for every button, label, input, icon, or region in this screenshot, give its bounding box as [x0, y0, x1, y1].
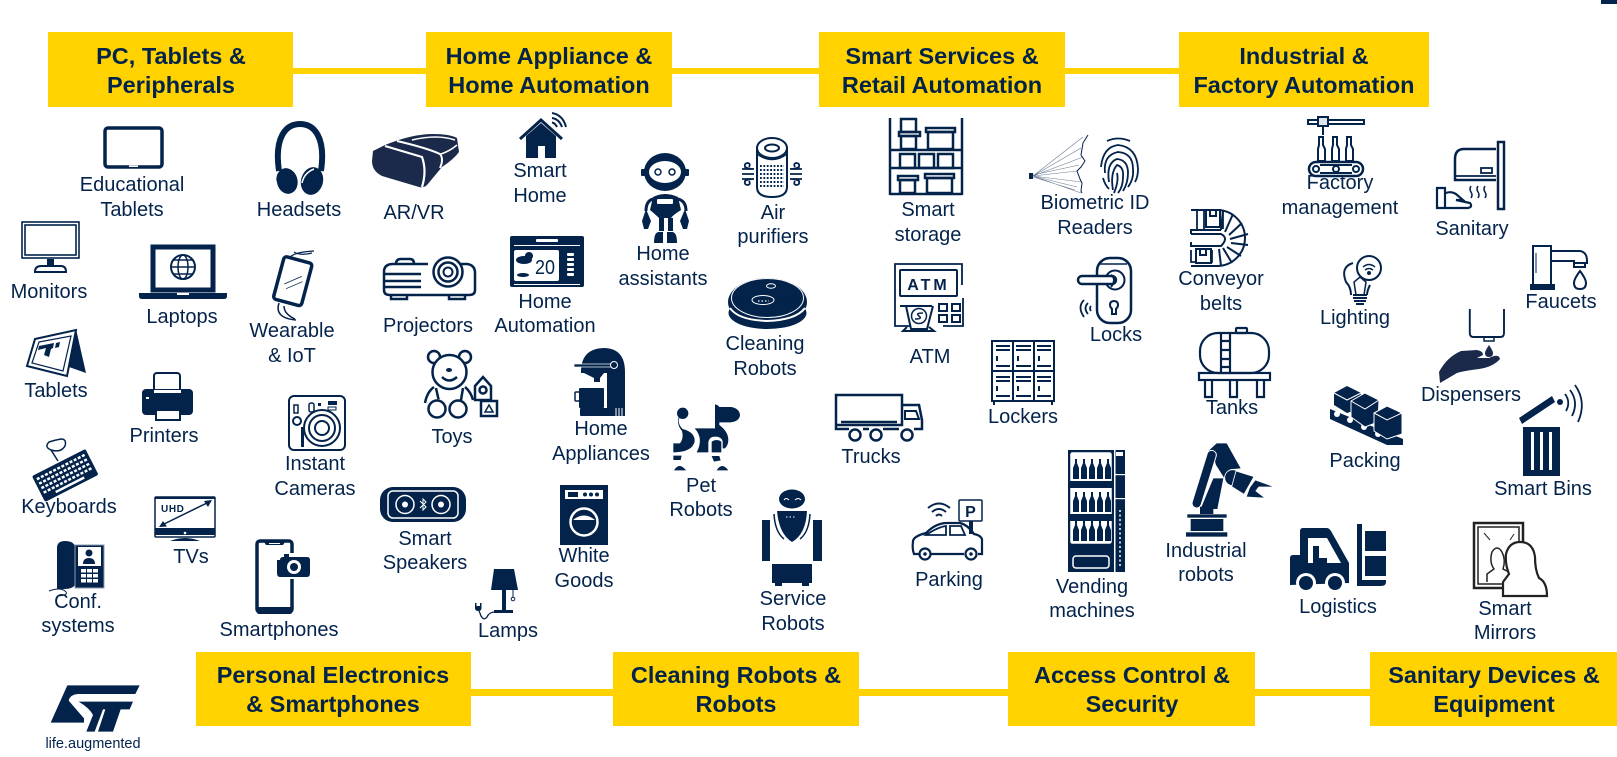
- icon: cleaning robot: [728, 278, 807, 329]
- heading: Personal Electronics & Smartphones: [196, 652, 471, 726]
- icon: ATM: [895, 264, 963, 331]
- icon: educational tablet: [105, 128, 162, 167]
- icon: hand dryer: [1437, 142, 1504, 209]
- label: Home assistants: Home: [636, 243, 690, 265]
- heading: Sanitary Devices & Equipment: Sanitary Devices &: [1388, 662, 1600, 688]
- icon: smart storage shelves: [890, 118, 962, 195]
- label: Pet Robots: [669, 475, 733, 521]
- heading: Personal Electronics & Smartphones: & Smartphones: [246, 691, 420, 717]
- label: Industrial robots: Industrial: [1165, 540, 1247, 562]
- label: Smart Home: Home: [513, 185, 567, 207]
- label: Dispensers: Dispensers: [1421, 384, 1521, 406]
- label: Factory management: Factory: [1307, 172, 1373, 194]
- label: Conf. systems: systems: [41, 615, 115, 637]
- heading: Industrial & Factory Automation: Industrial &: [1239, 43, 1369, 69]
- heading: Sanitary Devices & Equipment: Equipment: [1433, 691, 1555, 717]
- icon: factory bottling conveyor: [1308, 117, 1364, 176]
- icon: instant camera: [289, 396, 345, 450]
- label: Home Appliances: Home: [574, 418, 628, 440]
- label: Air purifiers: purifiers: [737, 226, 809, 248]
- label: Air purifiers: [737, 202, 809, 248]
- heading: Home Appliance & Home Automation: [426, 32, 672, 107]
- icon: smart parking: P: [965, 504, 976, 521]
- label: Pet Robots: Pet: [686, 475, 716, 497]
- heading: Cleaning Robots & Robots: [613, 652, 859, 726]
- icon: smart speaker: [380, 487, 466, 522]
- label: Smart Mirrors: [1474, 598, 1536, 644]
- label: Home assistants: assistants: [619, 268, 707, 290]
- icon: home automation panel: [510, 236, 584, 287]
- heading: Access Control & Security: [1008, 652, 1255, 726]
- icon: projector: [384, 257, 475, 299]
- label: Smart storage: storage: [895, 224, 961, 246]
- label: Factory management: [1282, 172, 1399, 219]
- icon: laptop: [139, 247, 227, 299]
- label: Lighting: Lighting: [1320, 307, 1390, 329]
- label: Smart Mirrors: Smart: [1478, 598, 1532, 620]
- label: Packing: Packing: [1329, 450, 1401, 472]
- label: Parking: Parking: [915, 569, 983, 591]
- icon: printer: [142, 373, 193, 420]
- heading: Smart Services & Retail Automation: [819, 32, 1065, 107]
- icon: toys: [425, 351, 497, 418]
- label: Instant Cameras: Cameras: [274, 478, 356, 500]
- icon: AR/VR headset: [372, 134, 459, 187]
- icon: keyboard: [32, 439, 99, 502]
- icon: forklift logistics: [1290, 524, 1386, 593]
- heading: PC, Tablets & Peripherals: Peripherals: [107, 72, 235, 98]
- label: Vending machines: Vending: [1056, 576, 1128, 598]
- label: Educational Tablets: Tablets: [100, 199, 164, 221]
- label: Conveyor belts: belts: [1200, 293, 1242, 315]
- logo: ST life.augmented: life.augmented: [45, 736, 141, 752]
- icon: vending machine: [1068, 450, 1125, 572]
- icon: smart parking: [913, 500, 982, 560]
- icon: UHD TV: [155, 497, 215, 541]
- icon: smart bin: [1519, 385, 1582, 476]
- icon: smart home: [520, 113, 566, 158]
- label: Wearable & IoT: & IoT: [268, 345, 316, 367]
- label: Industrial robots: robots: [1178, 564, 1234, 586]
- heading: Personal Electronics & Smartphones: Personal Electronics: [217, 662, 449, 688]
- label: White Goods: White: [558, 545, 610, 567]
- icon: conference phone: [49, 541, 104, 596]
- label: Cleaning Robots: [726, 333, 804, 380]
- icon: headset: [273, 124, 326, 197]
- icon: home assistant robot: [641, 153, 689, 243]
- icon: coffee machine: [574, 348, 625, 416]
- connector: top row: [293, 68, 1193, 74]
- label: Conf. systems: Conf.: [54, 591, 102, 613]
- label: Smart Home: Smart: [513, 160, 567, 182]
- label: Cleaning Robots: Cleaning: [726, 333, 804, 355]
- heading: Smart Services & Retail Automation: Retail Automation: [842, 72, 1042, 98]
- heading: Access Control & Security: Access Control &: [1034, 662, 1230, 688]
- icon: monitor: [22, 222, 79, 272]
- heading: Cleaning Robots & Robots: Robots: [696, 691, 776, 717]
- icon: smartphone with camera: [257, 541, 311, 614]
- label: Monitors: Monitors: [11, 281, 87, 303]
- heading: Cleaning Robots & Robots: Cleaning Robots &: [631, 662, 841, 688]
- label: Wearable & IoT: [249, 320, 335, 367]
- label: White Goods: Goods: [555, 570, 613, 592]
- label: Laptops: Laptops: [146, 306, 218, 328]
- heading: PC, Tablets & Peripherals: PC, Tablets &: [96, 43, 246, 69]
- label: TVs: TVs: [173, 546, 209, 568]
- label: Wearable & IoT: Wearable: [249, 320, 335, 342]
- label: Trucks: Trucks: [841, 446, 901, 468]
- label: AR/VR: AR/VR: [383, 202, 445, 224]
- icon: conveyor belt: [1191, 210, 1248, 266]
- label: Biometric ID Readers: [1041, 192, 1149, 239]
- icon: UHD TV: UHD: [161, 504, 184, 515]
- label: Home Automation: Automation: [494, 315, 596, 337]
- icon: air purifier: [742, 138, 802, 197]
- label: Biometric ID Readers: Readers: [1057, 217, 1133, 239]
- label: Printers: Printers: [130, 425, 198, 447]
- label: Smart storage: [895, 199, 961, 246]
- label: Home Automation: [494, 291, 596, 337]
- icon: smart watch: [273, 251, 314, 320]
- label: White Goods: [555, 545, 613, 592]
- label: Air purifiers: Air: [761, 202, 786, 224]
- label: Conveyor belts: [1178, 268, 1264, 315]
- label: Conf. systems: [41, 591, 115, 637]
- icon: biometric fingerprint and face scan: [1029, 135, 1138, 193]
- label: Toys: Toys: [431, 426, 473, 448]
- label: Factory management: management: [1282, 197, 1399, 219]
- icon: tablet on stand: [27, 329, 86, 376]
- icon: soap dispenser: [1439, 309, 1504, 383]
- icon: tank: [1199, 328, 1270, 397]
- label: Logistics: Logistics: [1299, 596, 1377, 618]
- label: Instant Cameras: [274, 453, 356, 500]
- icon: industrial robot arm: [1186, 443, 1273, 537]
- label: Educational Tablets: Educational: [80, 174, 184, 196]
- label: ATM: ATM: [910, 346, 950, 368]
- icon: packing conveyor: [1330, 386, 1403, 445]
- icon: smart lighting: [1344, 256, 1381, 304]
- logo: ST life.augmented: [45, 685, 141, 752]
- icon: faucet: [1531, 246, 1587, 289]
- label: Home assistants: [619, 243, 707, 290]
- label: Smart Mirrors: Mirrors: [1474, 622, 1536, 644]
- label: Keyboards: Keyboards: [21, 496, 117, 518]
- label: Instant Cameras: Instant: [285, 453, 345, 475]
- label: Smart Bins: Smart Bins: [1494, 478, 1592, 500]
- icon: home automation panel: 20: [535, 257, 555, 279]
- label: Home Appliances: [552, 418, 650, 465]
- connector: bottom row: [471, 689, 1371, 696]
- label: Service Robots: Robots: [761, 613, 825, 635]
- label: Locks: Locks: [1090, 324, 1142, 346]
- heading: Industrial & Factory Automation: Factory Automation: [1193, 72, 1415, 98]
- label: Smart Speakers: Smart: [398, 528, 452, 550]
- label: Educational Tablets: [80, 174, 184, 221]
- label: Headsets: Headsets: [257, 199, 341, 221]
- label: Smart Speakers: [383, 528, 467, 574]
- icon: ATM: ATM: [907, 277, 950, 294]
- label: Smart Home: [513, 160, 567, 207]
- icon: lamp: [475, 569, 518, 619]
- label: Biometric ID Readers: Biometric ID: [1041, 192, 1149, 214]
- heading: Access Control & Security: Security: [1086, 691, 1178, 717]
- label: Lockers: Lockers: [988, 406, 1058, 428]
- icon: lockers: [992, 341, 1054, 405]
- heading: Smart Services & Retail Automation: Smart Services &: [845, 43, 1039, 69]
- label: Faucets: Faucets: [1525, 291, 1597, 313]
- label: Sanitary: Sanitary: [1435, 218, 1509, 240]
- label: Projectors: Projectors: [383, 315, 473, 337]
- label: Pet Robots: Robots: [669, 499, 733, 521]
- label: Industrial robots: [1165, 540, 1247, 586]
- label: Tanks: Tanks: [1206, 397, 1258, 419]
- heading: PC, Tablets & Peripherals: [48, 32, 293, 107]
- heading: Sanitary Devices & Equipment: [1370, 652, 1617, 726]
- label: Home Appliances: Appliances: [552, 443, 650, 465]
- label: Service Robots: Service: [760, 588, 826, 610]
- label: Tablets: Tablets: [24, 380, 88, 402]
- label: Smart storage: Smart: [901, 199, 955, 221]
- label: Service Robots: [760, 588, 826, 635]
- label: Conveyor belts: Conveyor: [1178, 268, 1264, 290]
- icon: service robot: [762, 490, 822, 586]
- icon: washing machine: [560, 485, 608, 545]
- label: Smart Speakers: Speakers: [383, 552, 467, 574]
- label: Vending machines: [1049, 576, 1135, 622]
- heading: Home Appliance & Home Automation: Home Automation: [448, 72, 650, 98]
- heading: Home Appliance & Home Automation: Home Appliance &: [446, 43, 652, 69]
- icon: smart lock: [1078, 258, 1131, 323]
- icon: smart mirror: [1474, 523, 1547, 596]
- label: Cleaning Robots: Robots: [733, 358, 797, 380]
- icon: truck: [836, 395, 922, 440]
- icon: pet robot dog: [673, 404, 740, 470]
- label: Home Automation: Home: [518, 291, 572, 313]
- label: Lamps: Lamps: [478, 620, 538, 642]
- label: Smartphones: Smartphones: [220, 619, 338, 641]
- heading: Industrial & Factory Automation: [1179, 32, 1429, 107]
- label: Vending machines: machines: [1049, 600, 1135, 622]
